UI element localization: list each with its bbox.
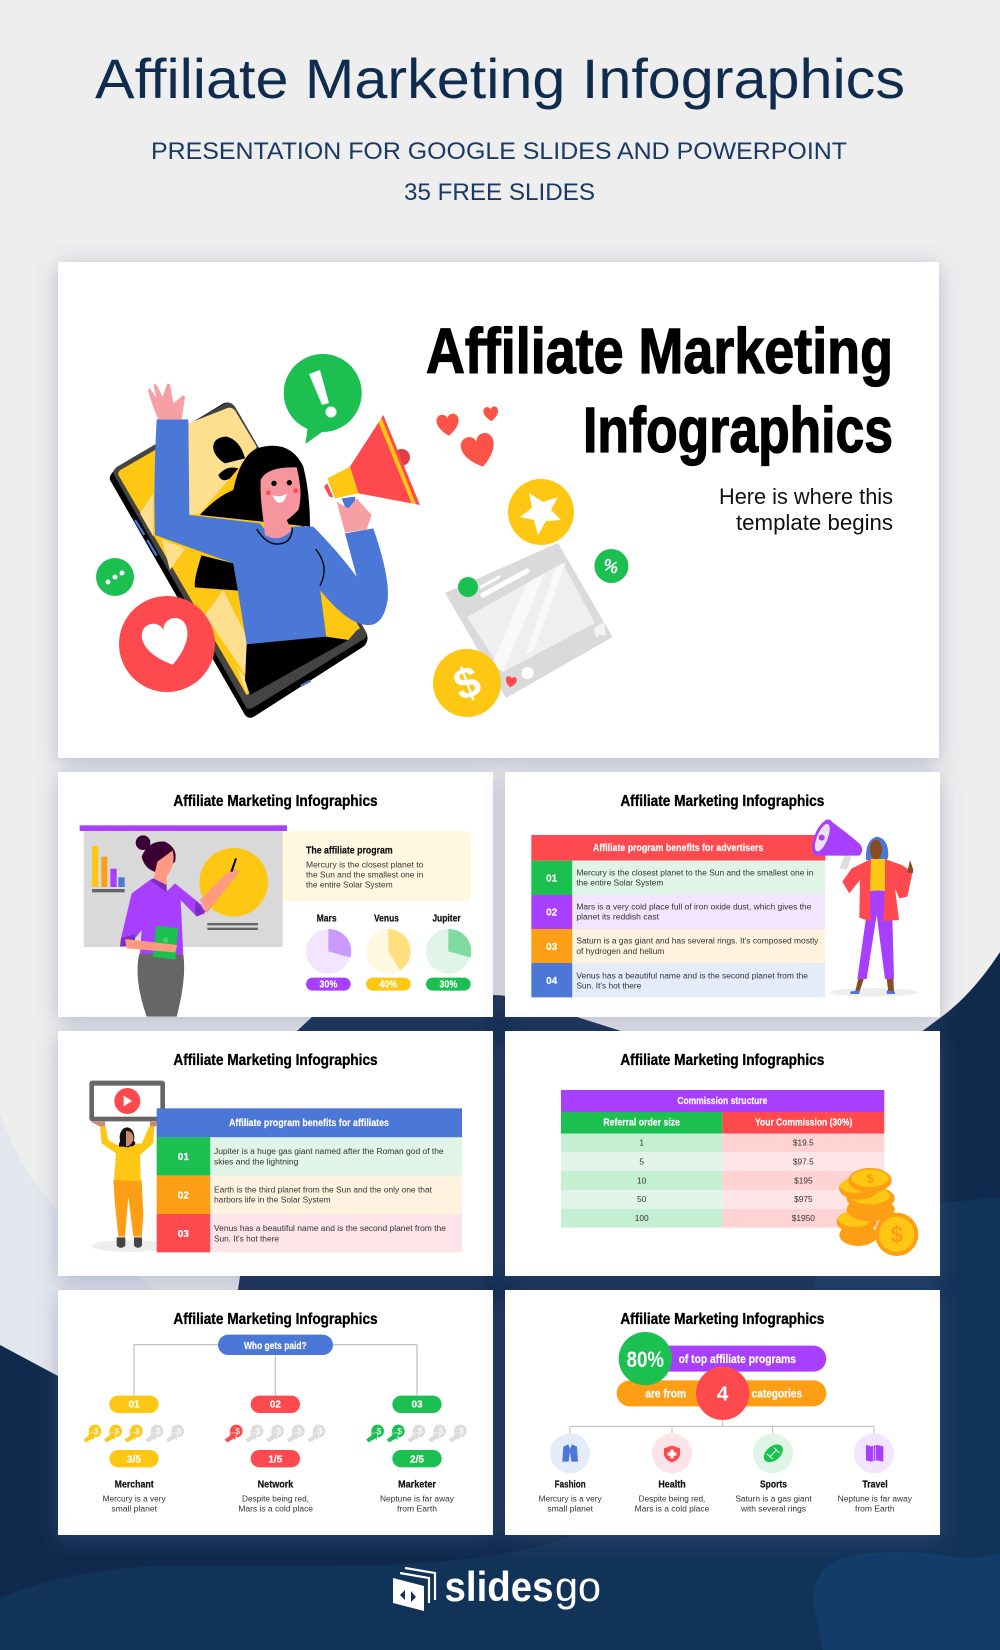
icon: percent badge: % xyxy=(600,555,621,578)
table: commission: Commission structure xyxy=(677,1096,768,1107)
panel: the affiliate program xyxy=(58,772,493,1017)
column: network: $ xyxy=(256,1426,261,1436)
panel: benefits for affiliates xyxy=(58,1031,493,1276)
category: health: Health xyxy=(658,1480,686,1491)
column: merchant: 01 xyxy=(128,1400,140,1411)
column: network: 1/5 xyxy=(268,1454,283,1465)
category: fashion: small planet xyxy=(547,1505,594,1514)
table: advertiser benefits: 01 xyxy=(546,874,558,885)
icon: dollar badge xyxy=(433,649,501,717)
icon: chat dots bubble xyxy=(96,558,134,596)
subtitle: PRESENTATION FOR GOOGLE SLIDES AND POWERPOINT xyxy=(151,138,847,165)
callout: affiliate program description: the Sun and the smallest one in xyxy=(306,871,423,880)
icon: hearts xyxy=(436,406,499,471)
table: commission: 5 xyxy=(639,1156,644,1166)
category: sports xyxy=(735,1433,812,1514)
callout: affiliate program description xyxy=(283,831,471,901)
megaphone xyxy=(393,449,410,466)
callout: 80 percent of top programs: 80% xyxy=(627,1347,664,1372)
text block: cover subtitle xyxy=(719,484,893,535)
column: marketer: $ xyxy=(377,1426,382,1436)
table: commission: $1950 xyxy=(792,1213,815,1223)
table: advertiser benefits: Affiliate program benefits for advertisers xyxy=(593,843,764,854)
category: fashion: Fashion xyxy=(555,1480,586,1491)
table: advertiser benefits: 02 xyxy=(546,908,558,919)
category: sports: Saturn is a gas giant xyxy=(735,1495,812,1504)
callout: 80 percent of top programs: of top affiliate programs xyxy=(679,1352,796,1366)
column: merchant: $ xyxy=(156,1426,161,1436)
logo: slidesgo: go xyxy=(555,1563,601,1610)
chart: Mars pie xyxy=(306,914,351,991)
column: merchant: Mercury is a very xyxy=(103,1495,166,1504)
icon: star badge xyxy=(508,479,574,545)
table: affiliate benefits: harbors life in the Solar System xyxy=(214,1196,331,1205)
table: commission: Referral order size xyxy=(603,1118,680,1129)
chart: Venus pie: Venus xyxy=(374,914,399,925)
hair back xyxy=(195,446,310,591)
column: merchant: $ xyxy=(94,1426,99,1436)
column: network: $ xyxy=(277,1426,282,1436)
chart: Jupiter pie: Jupiter xyxy=(432,914,461,925)
chart: Venus pie xyxy=(366,914,411,991)
table: commission: $97.5 xyxy=(793,1156,814,1166)
table: affiliate benefits: 02 xyxy=(178,1191,189,1202)
table: commission: 10 xyxy=(637,1175,647,1185)
icon: percent badge xyxy=(594,549,628,583)
table: commission: 1 xyxy=(639,1138,644,1148)
category: health xyxy=(635,1433,710,1514)
icon: exclamation speech bubble xyxy=(284,354,362,444)
callout: affiliate program description: Mercury is the closest planet to xyxy=(306,861,424,870)
panel: benefits for advertisers xyxy=(505,772,940,1017)
table: advertiser benefits: Mercury is the closest planet to the Sun and the smallest one in xyxy=(576,869,813,878)
column: merchant: 3/5 xyxy=(127,1454,141,1465)
column: marketer: from Earth xyxy=(397,1505,437,1514)
table: commission: Your Commission (30%) xyxy=(755,1118,852,1129)
body xyxy=(245,590,348,695)
column: merchant xyxy=(83,1396,184,1514)
illustration: woman holding video screen xyxy=(89,1081,166,1252)
text block: cover subtitle: Here is where this xyxy=(719,484,893,509)
icon: social post window xyxy=(445,543,613,698)
icon: dollar badge: $ xyxy=(447,656,487,711)
table: advertiser benefits xyxy=(531,835,825,997)
column: marketer: Neptune is far away xyxy=(380,1495,454,1504)
callout: affiliate program description: The affiliate program xyxy=(306,845,393,856)
heading: Affiliate Marketing Infographics xyxy=(620,1052,824,1069)
callout: 80 percent of top programs: 4 xyxy=(717,1382,729,1405)
table: affiliate benefits: Affiliate program benefits for affiliates xyxy=(229,1118,389,1129)
category: travel: from Earth xyxy=(855,1505,895,1514)
chart: Mars pie: 30% xyxy=(319,980,337,991)
column: marketer xyxy=(366,1396,467,1514)
subtitle xyxy=(151,138,847,206)
callout: 80 percent of top programs: are from xyxy=(645,1387,686,1401)
column: merchant: Merchant xyxy=(115,1480,154,1491)
icon: heart badge xyxy=(119,596,215,692)
table: advertiser benefits: planet its reddish cast xyxy=(576,913,660,922)
table: advertiser benefits: Venus has a beautiful name and is the second planet from the xyxy=(576,971,809,980)
column: network: Mars is a cold place xyxy=(238,1505,314,1514)
table: advertiser benefits: Mars is a very cold place full of iron oxide dust, which gives the xyxy=(576,903,812,912)
category: fashion xyxy=(539,1433,602,1514)
category: travel: Neptune is far away xyxy=(838,1495,912,1504)
column: network: $ xyxy=(235,1426,240,1436)
heading: cover title: Affiliate Marketing xyxy=(426,315,893,387)
node: who gets paid xyxy=(218,1335,333,1355)
text block: cover subtitle: template begins xyxy=(736,510,893,535)
node: who gets paid: Who gets paid? xyxy=(244,1341,307,1352)
logo: slidesgo: slides xyxy=(444,1563,554,1610)
category: travel xyxy=(838,1433,912,1514)
table: commission: $975 xyxy=(794,1194,813,1204)
column: network: Network xyxy=(258,1480,294,1491)
table: affiliate benefits: skies and the lightning xyxy=(214,1157,298,1166)
logo: slidesgo xyxy=(393,1563,601,1611)
heading: Affiliate Marketing Infographics xyxy=(173,793,378,810)
column: network xyxy=(225,1396,325,1514)
table: advertiser benefits: Saturn is a gas giant and has several rings. It's composed mostly xyxy=(576,937,818,946)
table: affiliate benefits: 01 xyxy=(178,1152,189,1163)
panel: top programs categories xyxy=(505,1290,940,1535)
heading: Affiliate Marketing Infographics xyxy=(173,1311,378,1328)
category: fashion: Mercury is a very xyxy=(539,1495,602,1504)
table: advertiser benefits: 04 xyxy=(546,976,558,987)
column: network: 02 xyxy=(270,1400,281,1411)
heading: Affiliate Marketing Infographics xyxy=(620,793,824,810)
table: commission: 100 xyxy=(635,1213,649,1223)
heading: cover title xyxy=(426,315,893,466)
column: marketer: $ xyxy=(439,1426,444,1436)
table: affiliate benefits: Sun. It's hot there xyxy=(214,1234,280,1243)
category: sports: Sports xyxy=(760,1480,787,1491)
table: affiliate benefits: Earth is the third planet from the Sun and the only one that xyxy=(214,1186,433,1195)
heading: Affiliate Marketing Infographics xyxy=(173,1052,378,1069)
chart: Jupiter pie: 30% xyxy=(439,980,457,991)
subtitle: 35 FREE SLIDES xyxy=(404,179,595,206)
table: affiliate benefits: Jupiter is a huge gas giant named after the Roman god of the xyxy=(214,1147,444,1156)
panel: main cover slide xyxy=(58,262,939,758)
category: health: Mars is a cold place xyxy=(635,1505,710,1514)
table: advertiser benefits: the entire Solar System xyxy=(576,879,664,888)
category: health: Despite being red, xyxy=(639,1495,705,1504)
category: sports: with several rings xyxy=(740,1505,806,1514)
chart: Venus pie: 40% xyxy=(379,980,397,991)
table: commission: 50 xyxy=(637,1194,647,1204)
table: advertiser benefits: of hydrogen and helium xyxy=(576,947,665,956)
panel: commission structure xyxy=(505,1031,940,1276)
column: marketer: 2/5 xyxy=(410,1454,424,1465)
column: merchant: small planet xyxy=(111,1505,158,1514)
callout: affiliate program description: the entire Solar System xyxy=(306,881,393,890)
column: network: $ xyxy=(318,1426,323,1436)
table: commission: $19.5 xyxy=(793,1138,814,1148)
callout: 80 percent of top programs: categories xyxy=(752,1387,802,1401)
chart: Mars pie: Mars xyxy=(317,914,337,925)
table: affiliate benefits: 03 xyxy=(178,1229,189,1240)
chart: Jupiter pie xyxy=(426,914,471,991)
callout: 80 percent of top programs xyxy=(617,1332,826,1420)
column: merchant: $ xyxy=(115,1426,120,1436)
illustration: woman with purple megaphone xyxy=(808,817,918,997)
icon: coin stack xyxy=(837,1168,918,1256)
icon: coin stack: $ xyxy=(866,1172,874,1186)
column: marketer: Marketer xyxy=(398,1480,436,1491)
heading: cover title: Infographics xyxy=(583,394,893,466)
panel: who gets paid xyxy=(58,1290,493,1535)
table: commission xyxy=(561,1090,884,1228)
table: affiliate benefits xyxy=(157,1108,462,1252)
icon: coin stack: $ xyxy=(890,1221,903,1247)
column: marketer: 03 xyxy=(411,1400,423,1411)
table: affiliate benefits: Venus has a beautiful name and is the second planet from the xyxy=(214,1224,447,1233)
category: travel: Travel xyxy=(862,1480,888,1491)
column: merchant: $ xyxy=(177,1426,182,1436)
column: network: $ xyxy=(297,1426,302,1436)
illustration: presenter woman xyxy=(120,835,238,1017)
illustration: woman with megaphone emerging from phone xyxy=(110,383,420,718)
column: merchant: $ xyxy=(135,1426,140,1436)
column: marketer: $ xyxy=(418,1426,423,1436)
title: Affiliate Marketing Infographics xyxy=(95,47,905,110)
table: advertiser benefits: Sun. It's hot there xyxy=(576,981,642,990)
column: network: Despite being red, xyxy=(242,1495,309,1504)
column: marketer: $ xyxy=(459,1426,464,1436)
illustration: presentation board xyxy=(80,825,287,947)
heading: Affiliate Marketing Infographics xyxy=(620,1311,824,1328)
column: marketer: $ xyxy=(397,1426,402,1436)
table: commission: $195 xyxy=(794,1175,813,1185)
table: advertiser benefits: 03 xyxy=(546,942,558,953)
